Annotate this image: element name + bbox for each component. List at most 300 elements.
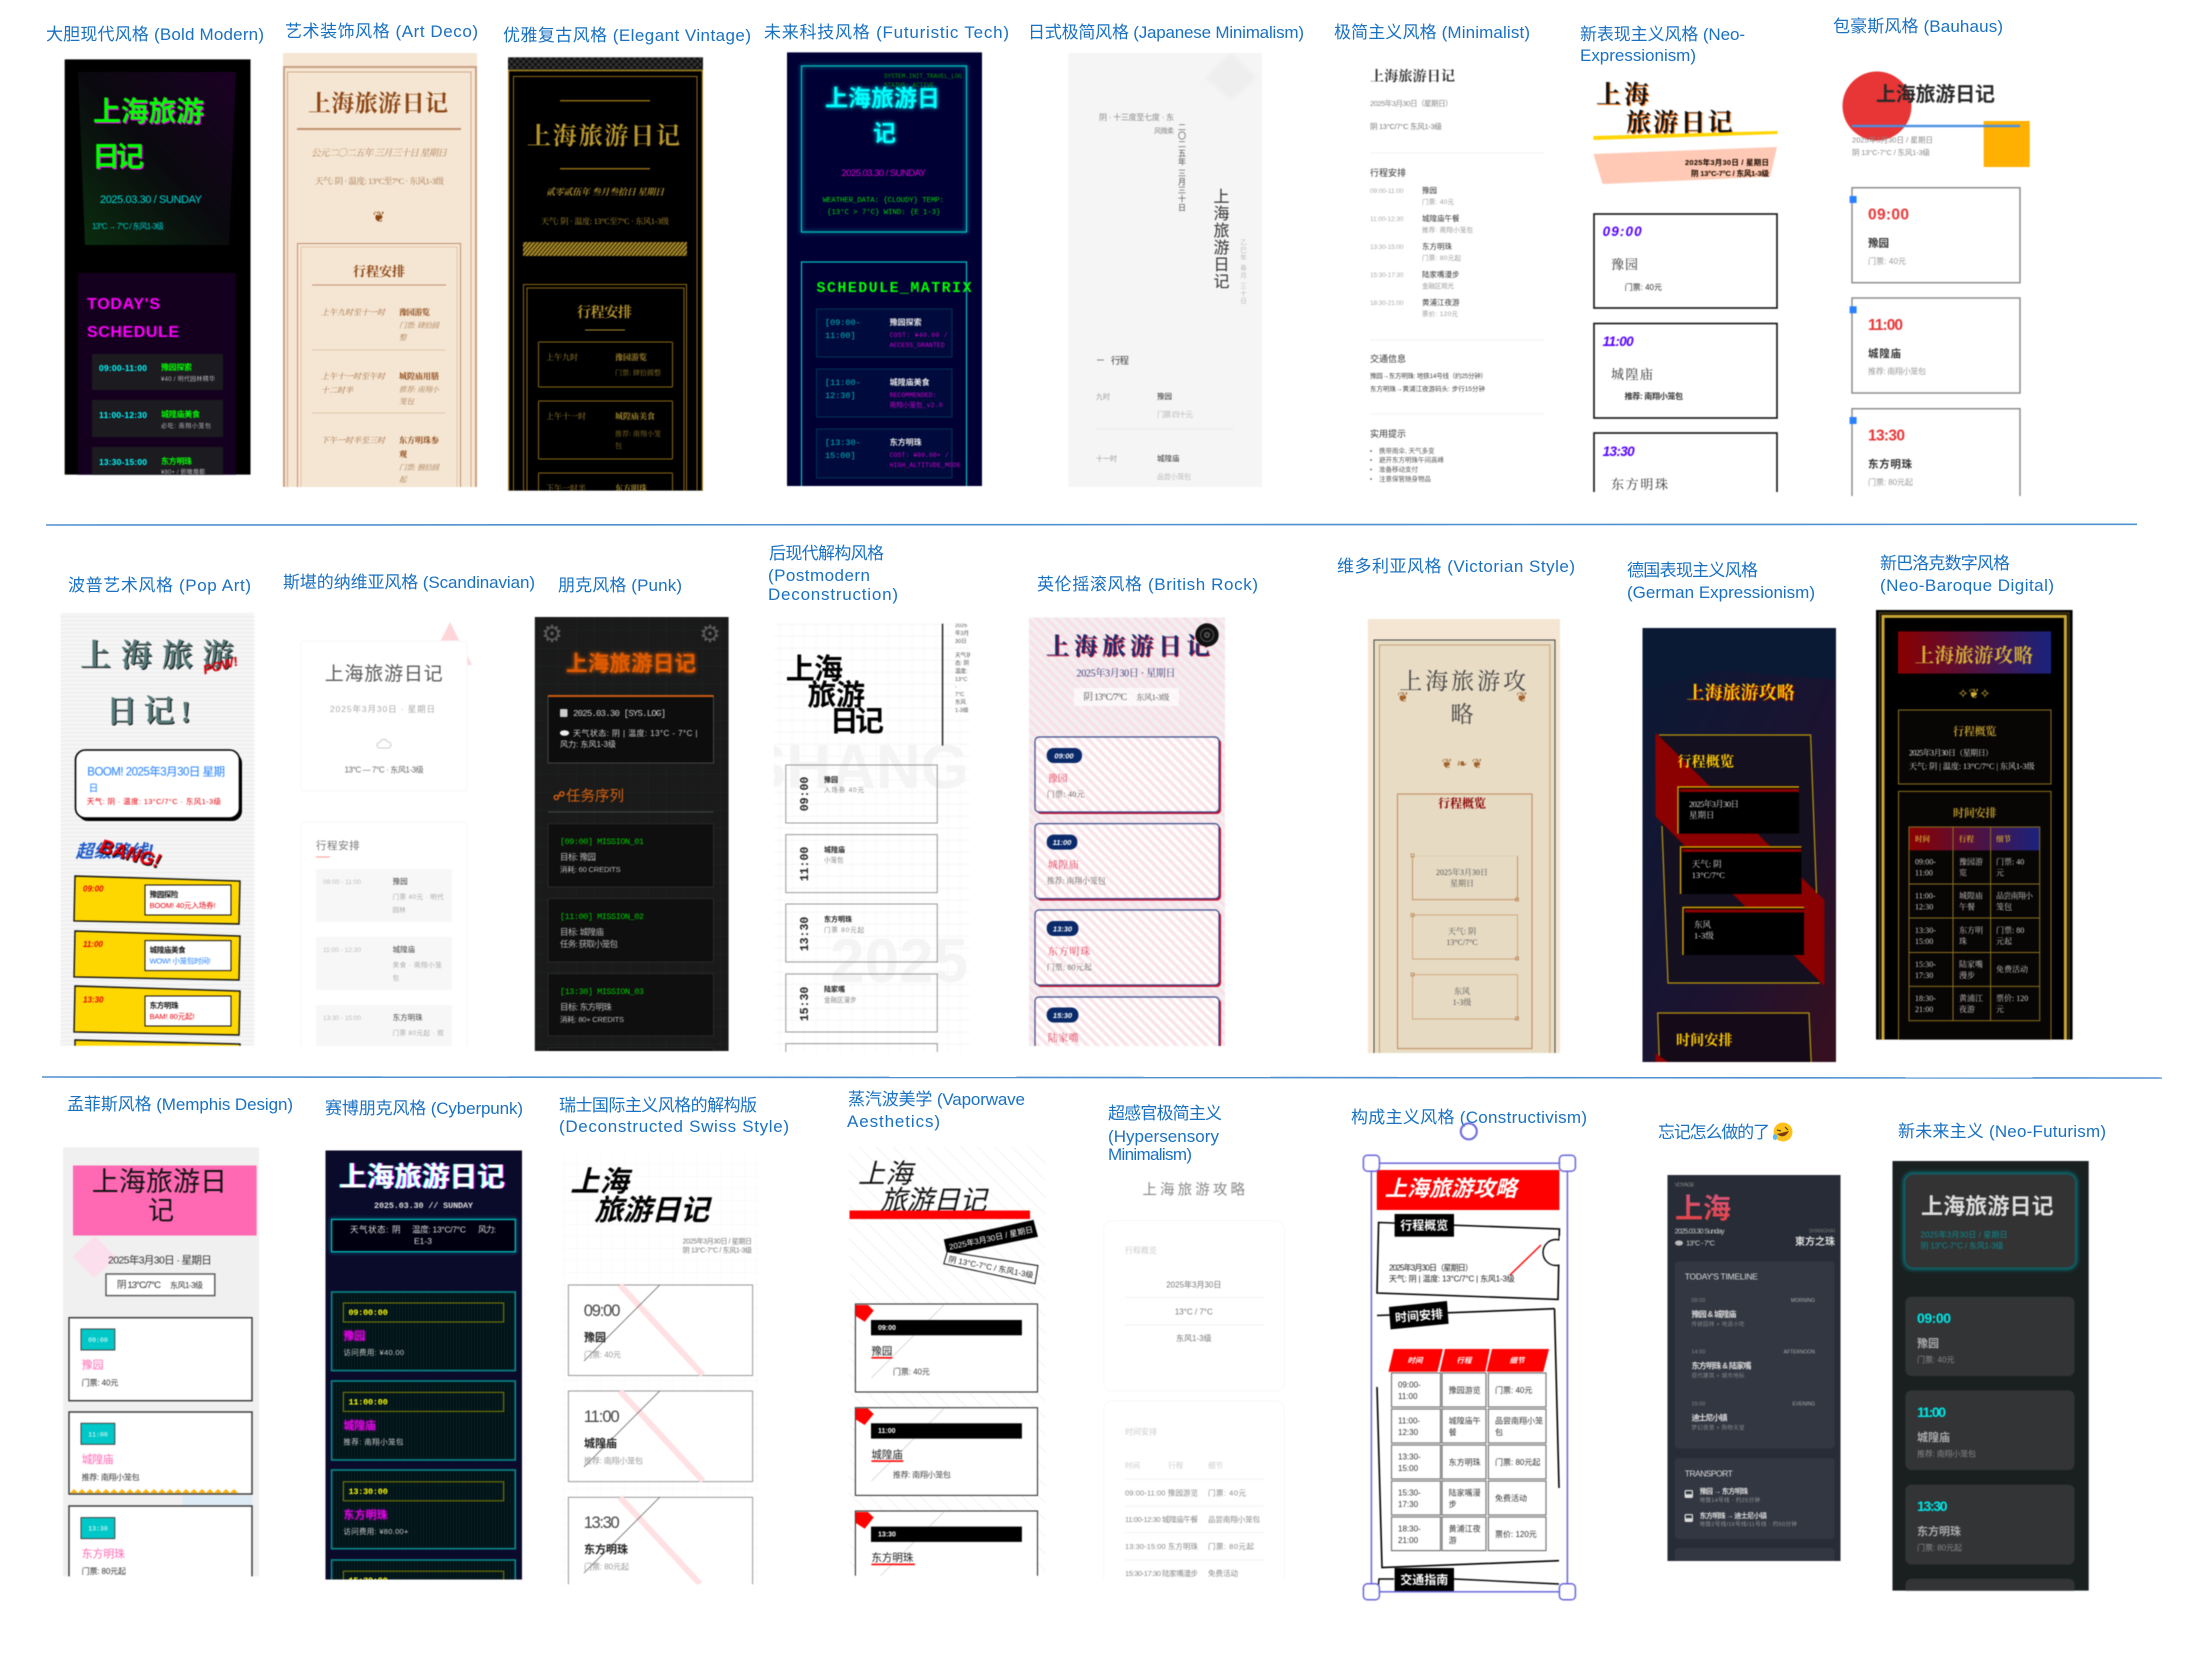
schedule card: 免费活动 [1208, 1568, 1238, 1578]
schedule box: 游 [1449, 1535, 1457, 1545]
card: City God Temple: 11:00 [1053, 838, 1072, 847]
panel: Elegant Vintage [507, 56, 704, 493]
watermark: SHANGHAI [745, 733, 1076, 802]
schedule card: 细节 [1208, 1460, 1224, 1470]
schedule: 15:30-17:30 [1370, 272, 1404, 279]
timeline card: 14:00 [1692, 1350, 1705, 1356]
vertical title: 上海旅游日记 [1210, 188, 1230, 290]
schedule box: 整 [399, 333, 408, 342]
card: Oriental Pearl: 13:30 [88, 1526, 108, 1533]
panel: Punk [534, 616, 730, 1052]
card: 15:30: 陆家嘴 [824, 984, 845, 994]
panel: Minimalist [1370, 68, 1487, 483]
card: Oriental Pearl [1035, 910, 1221, 987]
timeline card: TODAY'S TIMELINE [1685, 1272, 1758, 1282]
timeline card: MORNING [1791, 1298, 1815, 1304]
icon: laughing emoji [1773, 1122, 1792, 1142]
heading: Victorian Style: 维多利亚风格 (Victorian Style) [1337, 557, 1575, 576]
card: City God Temple: 推荐: 南翔小笼包 [1047, 875, 1106, 885]
schedule matrix: 12:30] [825, 391, 856, 401]
icons: ornaments: ❦ ❧ ❦ [1442, 757, 1482, 772]
card: Oriental Pearl: 13:30 [1917, 1498, 1948, 1514]
card: City God Temple: 推荐: 南翔小笼包 [82, 1472, 140, 1482]
section title: 超级路线! [76, 842, 154, 862]
divider: row 2 and row 3 [42, 1077, 2162, 1078]
schedule box: 豫园游览 [399, 307, 430, 317]
weather [1074, 688, 1179, 706]
schedule card: 门票: 80元起 [1208, 1542, 1254, 1551]
schedule box [298, 244, 460, 547]
schedule box: 观 [399, 449, 407, 459]
heading: Japanese Minimalism: 日式极简风格 (Japanese Minimalism) [1028, 23, 1304, 42]
title: 上海 [786, 653, 843, 686]
heading: Constructivism: 构成主义风格 (Constructivism) [1351, 1108, 1587, 1127]
schedule box: 15:00 [1398, 1464, 1419, 1473]
schedule: 门票: 80元起 [1422, 253, 1462, 262]
mission 1: 目标: 豫园 [560, 852, 596, 862]
schedule box: 11:00 [1915, 869, 1933, 878]
timeline card: 豫园 & 城隍庙 [1692, 1309, 1736, 1319]
schedule box: 陆家嘴漫 [1449, 1488, 1481, 1498]
schedule box: 黄浦江夜 [1449, 1524, 1481, 1534]
itinerary: 行程 [1111, 355, 1129, 367]
tips: 携带雨伞, 天气多变 [1379, 446, 1435, 455]
schedule block: 13:30-15:00 [99, 457, 147, 467]
card: City God Temple [1594, 324, 1777, 418]
overview box: 2025年3月30日 [1436, 867, 1488, 877]
schedule box: 豫园游览 [615, 352, 647, 362]
schedule box: 笼包 [399, 397, 414, 406]
panel: Memphis Design [63, 1148, 259, 1578]
schedule box: 十二时半 [321, 386, 354, 395]
panel: Futuristic Tech [786, 52, 983, 487]
card: City God Temple [332, 1381, 515, 1460]
heading: Hypersensory Minimalism [1108, 1104, 1222, 1164]
date: 2025年3月30日 · 星期日 [1076, 666, 1176, 679]
title: 上海旅游日记 [308, 91, 448, 116]
card: 09:00: 09:00 [584, 1302, 620, 1320]
header block [78, 72, 236, 245]
schedule box: 东方明珠 [1449, 1457, 1481, 1467]
schedule card: 品尝南翔小笼包 [1208, 1514, 1260, 1524]
card: 11:00 [786, 835, 937, 893]
mission 1 [548, 824, 714, 887]
heading: Cyberpunk: 赛博朋克风格 (Cyberpunk) [325, 1098, 523, 1118]
card: Yuyuan: 门票: 40元 [1625, 282, 1662, 292]
heading: Hypersensory Minimalism: Minimalism) [1108, 1145, 1192, 1164]
schedule matrix: 11:00] [825, 331, 856, 341]
icons: gears: ⚙ [541, 620, 563, 648]
mission 3: [13:30] MISSION_03 [560, 987, 644, 997]
heading: Pop Art: 波普艺术风格 (Pop Art) [68, 576, 251, 595]
weather label: 阴 13°C-7°C / 东风1-3级 [948, 1254, 1034, 1280]
panel: Cyberpunk [324, 1150, 523, 1586]
schedule block: SCHEDULE [87, 324, 179, 341]
card: Yuyuan [1594, 214, 1777, 308]
card: City God Temple: 城隍庙 [1917, 1430, 1950, 1444]
date: 2025.03.30 // SUNDAY [374, 1201, 474, 1211]
title [80, 638, 234, 729]
schedule box: 细节 [1510, 1356, 1526, 1365]
schedule card [301, 822, 467, 1062]
schedule block: 09:00-11:00 [99, 363, 147, 373]
schedule box: 21:00 [1398, 1536, 1419, 1545]
timeline card: 09:00 [1692, 1298, 1705, 1304]
tips: 准备移动支付 [1379, 464, 1418, 474]
schedule card: 东方明珠 [393, 1012, 423, 1022]
card: Lujiazui [1035, 997, 1221, 1074]
card: 09:00: 豫园 [584, 1330, 606, 1344]
schedule card [1104, 1401, 1284, 1621]
section title [548, 788, 714, 812]
card: Oriental Pearl: 东方明珠 [1917, 1524, 1961, 1538]
schedule card: 时间 [1125, 1460, 1140, 1470]
schedule card: 包 [393, 973, 400, 982]
schedule matrix: 城隍庙美食 [890, 377, 930, 387]
card: 13:30: 13:30 [799, 917, 812, 951]
card: Oriental Pearl: 东方明珠 [1611, 477, 1668, 492]
date and weather: 天气: 阴 · 温度: 13°C至7°C · 东风1-3级 [541, 216, 669, 226]
timeline card: 东方明珠 & 陆家嘴 [1692, 1361, 1752, 1371]
card: City God Temple: 推荐: 南翔小笼包 [343, 1436, 404, 1446]
schedule box: 笼包 [1996, 902, 2012, 912]
heading: German Expressionism [1627, 561, 1815, 602]
schedule box: 09:00- [1398, 1380, 1421, 1390]
overview section: 东风 [1694, 920, 1712, 930]
card: 15:30 [786, 974, 937, 1032]
panel: Bauhaus [1842, 70, 2030, 496]
schedule box: 时间安排 [1953, 805, 1996, 819]
schedule box: 餐 [1449, 1428, 1457, 1437]
panel: Hypersensory Minimalism [1124, 1181, 1260, 1578]
schedule box: 时间安排 [1394, 1306, 1444, 1325]
title block: 记 [148, 1196, 174, 1226]
timeline card: EVENING [1792, 1401, 1815, 1407]
itinerary: 品尝小笼包 [1157, 472, 1191, 481]
header card [301, 641, 467, 791]
timeline card: 迪士尼小镇 [1692, 1412, 1728, 1422]
schedule box: 细节 [1996, 833, 2012, 843]
title: 上海 [570, 1167, 633, 1199]
icon: ornament: ❦ [373, 208, 385, 226]
schedule box: 上午九时至十一时 [321, 308, 386, 317]
speech bubble: 天气: 阴 · 温度: 13°C/7°C · 东风1-3级 [87, 796, 222, 806]
schedule box: 元起 [1996, 936, 2012, 946]
schedule block: ¥40 / 明代园林精华 [161, 375, 215, 383]
schedule box: 览 [1959, 868, 1967, 878]
overview box: 行程概览 [1400, 1218, 1448, 1232]
overview box: 星期日 [1450, 878, 1474, 888]
panel: Bold Modern [64, 58, 252, 476]
card: City God Temple: 城隍庙 [1611, 367, 1653, 382]
header card: 13°C — 7°C · 东风1-3级 [344, 764, 424, 774]
transport: 东方明珠→黄浦江夜游码头: 步行15分钟 [1370, 384, 1486, 393]
schedule box: 品尝南翔小 [1996, 891, 2034, 901]
time section: 时间安排 [1676, 1032, 1732, 1049]
header block: 13°C → 7°C / 东风1-3级 [92, 221, 164, 231]
date label: 2025年3月30日 / 星期日 [948, 1224, 1034, 1252]
card: 09:00 [568, 1285, 753, 1376]
weather box: 风力: [478, 1225, 496, 1235]
pale blue accent [183, 1496, 252, 1506]
panel: Neo-Baroque Digital [1875, 609, 2074, 1040]
date and weather [541, 187, 669, 226]
mission 2 [548, 899, 714, 962]
schedule: 东方明珠 [1422, 241, 1452, 251]
overview box [1377, 1214, 1572, 1299]
icons: gears: ⚙ [699, 620, 721, 648]
schedule box: 门票: 40元 [1495, 1385, 1532, 1395]
log card [548, 695, 714, 763]
meta text: 30日 [955, 638, 967, 645]
overview section: 星期日 [1689, 810, 1715, 820]
transport label: 交通指南 [1400, 1572, 1448, 1587]
schedule matrix: [11:00- [825, 378, 861, 388]
title: 日记 [830, 705, 884, 738]
card: 09:00 [786, 765, 937, 823]
headings [46, 16, 2106, 1164]
card: Yuyuan: 豫园探险 [150, 889, 179, 899]
panel: Japanese Minimalism [1069, 54, 1262, 486]
title: 上海旅游日记 [1876, 82, 1995, 106]
schedule box: 推荐: 南翔小 [399, 385, 440, 394]
heading: Elegant Vintage: 优雅复古风格 (Elegant Vintage) [503, 26, 751, 45]
panel: Neo-Expressionism [1542, 81, 1779, 1257]
overview box [1898, 710, 2051, 784]
itinerary: 城隍庙 [1157, 453, 1180, 463]
panel: Art Deco [282, 52, 478, 488]
card: Yuyuan: 门票: 40元 [82, 1378, 118, 1388]
header card: 2025年3月30日 · 星期日 [330, 704, 435, 714]
timeline card: 现代建筑 × 城市地标 [1692, 1372, 1745, 1380]
card: Yuyuan [1905, 1297, 2074, 1376]
schedule box [524, 284, 686, 588]
overview box: 行程概览 [1953, 724, 1996, 738]
card: Yuyuan [855, 1304, 1038, 1392]
heading: Postmodern Deconstruction: 后现代解构风格 [769, 544, 884, 563]
title: 上海旅游日记 [527, 123, 680, 150]
heading: Futuristic Tech: 未来科技风格 (Futuristic Tech) [764, 23, 1009, 42]
schedule box: 免费活动 [1996, 964, 2028, 974]
card: Yuyuan: 09:00 [878, 1325, 896, 1332]
heading: Postmodern Deconstruction: Deconstruction) [768, 585, 898, 604]
schedule box: 13:30- [1915, 926, 1936, 935]
card: 09:00: 09:00 [799, 777, 812, 811]
title banner [1377, 1170, 1559, 1210]
heading: Bauhaus: 包豪斯风格 (Bauhaus) [1833, 16, 2003, 36]
title: 略 [1450, 702, 1474, 727]
mission 3 [548, 974, 714, 1036]
card: Yuyuan: 豫园 [82, 1359, 104, 1372]
header: 上海 [1675, 1193, 1731, 1224]
schedule block: 11:00-12:30 [99, 410, 147, 420]
overview box: 天气: 阴 | 温度: 13°C/7°C | 东风1-3级 [1909, 761, 2035, 771]
speech bubble: 日 [89, 783, 98, 794]
weather: 阴 · 十三度至七度 · 东 [1099, 112, 1174, 122]
title: 日记! [106, 694, 191, 729]
card: Oriental Pearl: 13:30 [1603, 444, 1635, 459]
header card: 上海旅游日记 [1921, 1194, 2054, 1219]
timeline card: AFTERNOON [1784, 1350, 1815, 1356]
log card: 2025.03.30 [SYS.LOG] [573, 709, 666, 719]
overview section: 2025年3月30日 [1689, 799, 1739, 809]
card: City God Temple [1035, 824, 1221, 901]
meta text: 7°C [955, 692, 964, 698]
schedule box: 12:30 [1915, 903, 1933, 912]
heading: Postmodern Deconstruction [768, 544, 898, 604]
card: City God Temple: 城隍庙 [343, 1418, 376, 1432]
timeline card: 梦幻夜景 × 购物天堂 [1692, 1423, 1745, 1431]
card: Yuyuan [1850, 188, 2020, 283]
heading: Neo-Expressionism: Expressionism) [1580, 46, 1696, 65]
card: Yuyuan: 09:00 [1054, 752, 1074, 760]
heading: Deconstructed Swiss Style [559, 1096, 789, 1136]
transport [1370, 353, 1487, 393]
schedule matrix: 南翔小笼包_v2.0 [890, 400, 943, 409]
timeline card: 传统园林 × 地道小吃 [1692, 1320, 1745, 1328]
icons: ornaments [1397, 690, 1528, 772]
schedule box: 18:30- [1398, 1524, 1421, 1534]
card: Oriental Pearl: 门票: 80元起 [1047, 962, 1092, 972]
transport card: 东方明珠 → 迪士尼小镇 [1700, 1511, 1767, 1520]
card: City God Temple: 城隍庙 [871, 1448, 903, 1461]
transport label [1378, 1568, 1559, 1591]
heading: Neo-Expressionism: 新表现主义风格 (Neo- [1580, 25, 1745, 44]
card: Oriental Pearl: 东方明珠 [1868, 458, 1912, 470]
card: Yuyuan: 09:00 [88, 1337, 108, 1344]
overview box: 2025年3月30日（星期日） [1909, 748, 1993, 758]
card: Yuyuan: BOOM! 40元入场券! [150, 900, 216, 910]
schedule matrix [802, 262, 972, 502]
overview box: 天气: 阴 [1448, 926, 1476, 936]
watermark: 2025 [830, 927, 968, 996]
header card: 上海旅游日记 [325, 663, 443, 685]
tips [1370, 428, 1444, 483]
meta text [955, 623, 972, 714]
header card [1905, 1174, 2075, 1268]
overview section: 13°C/7°C [1692, 870, 1725, 880]
transport card [1675, 1458, 1835, 1539]
schedule: 黄浦江夜游 [1422, 297, 1460, 307]
panel: German Expressionism [1642, 627, 1837, 1063]
card: City God Temple: 11:00 [83, 940, 103, 949]
schedule box: 下午一时半 [546, 483, 586, 493]
schedule box: 门票: 肆拾圆 [399, 321, 440, 330]
icons: ornaments: ❦ [1397, 690, 1409, 706]
date and weather [1852, 134, 1933, 157]
meta text: 天气状 [955, 651, 972, 659]
title [570, 1167, 713, 1227]
schedule box: 元 [1996, 1005, 2004, 1014]
schedule: 城隍庙午餐 [1422, 213, 1460, 223]
card: Oriental Pearl: 13:30:00 [348, 1487, 388, 1497]
header block: 日记 [92, 141, 144, 172]
transport: 豫园→东方明珠: 地铁14号线（约25分钟） [1370, 371, 1487, 380]
schedule block: 必吃: 南翔小笼包 [161, 422, 211, 430]
card: Yuyuan: 09:00 [83, 884, 104, 893]
overview card: 13°C / 7°C [1175, 1307, 1213, 1316]
panel: Constructivism [1363, 1123, 1575, 1600]
schedule card: 园林 [393, 905, 406, 914]
weather box [106, 1274, 215, 1296]
schedule box: 门票: 80 [1996, 925, 2024, 935]
weather box: 天气状态: 阴 [350, 1225, 400, 1235]
schedule box: 品尝南翔小笼 [1495, 1416, 1543, 1426]
meta text: 东风 [955, 698, 967, 706]
weather box: 温度: 13°C/7°C [412, 1225, 466, 1235]
overview card [1104, 1221, 1284, 1391]
schedule box: 18:30- [1915, 994, 1936, 1003]
card: Oriental Pearl: 访问费用: ¥80.00+ [343, 1526, 409, 1536]
schedule box: 起 [399, 475, 408, 484]
title banner: 上海旅游攻略 [1385, 1176, 1520, 1201]
heading: Vaporwave Aesthetics [847, 1090, 1025, 1131]
card: Lujiazui: 15:30 [1053, 1011, 1073, 1020]
section title: 任务序列 [566, 788, 624, 805]
header [1898, 631, 2051, 674]
vertical date: 二〇二五年 三月三十日 [1178, 123, 1186, 212]
header box: STATUS: ACTIVE [884, 82, 934, 89]
card: City God Temple: 11:00 [1603, 334, 1634, 349]
weather [1099, 112, 1174, 135]
tips: 避开东方明珠午间高峰 [1379, 455, 1444, 464]
schedule box: 11:00- [1915, 892, 1936, 901]
selection frame [1363, 1123, 1575, 1600]
schedule: 09:00-11:00 [1370, 188, 1404, 195]
card: Oriental Pearl [74, 986, 240, 1035]
heading: Deconstructed Swiss Style: 瑞士国际主义风格的解构版 [559, 1096, 757, 1115]
speech bubble: BOOM! 2025年3月30日 星期 [87, 764, 225, 778]
schedule box: 黄浦江 [1959, 993, 1983, 1003]
schedule card: 13:30 - 15:00 [323, 1015, 361, 1022]
schedule box: 漫步 [1959, 970, 1975, 980]
card: Oriental Pearl [1850, 409, 2020, 519]
icons: ornaments: ✧❦✧ [1958, 687, 1990, 702]
card: 11:00: 城隍庙 [824, 845, 845, 854]
hatched band [523, 242, 687, 256]
weather: 阴 13°C/7°C [1084, 692, 1127, 703]
header box: 2025.03.30 / SUNDAY [842, 168, 927, 179]
heading: British Rock: 英伦摇滚风格 (British Rock) [1037, 575, 1258, 594]
title [1596, 81, 1732, 137]
header: SHANGHAI [1809, 1229, 1835, 1235]
card: 09:00: 入场券 40元 [824, 785, 864, 794]
header [1675, 1182, 1835, 1248]
date and weather: 阴 13°C/7°C 东风1-3级 [1370, 121, 1442, 131]
schedule card: 09:00 - 11:00 [323, 879, 361, 886]
heading: Vaporwave Aesthetics: Aesthetics) [847, 1112, 940, 1131]
weather: 风微柔 [1154, 126, 1174, 135]
schedule: 推荐: 南翔小笼包 [1422, 225, 1474, 234]
schedule box: 15:00 [1915, 937, 1933, 946]
header: 2025.03.30 Sunday [1675, 1229, 1725, 1236]
header: 東方之珠 [1795, 1235, 1835, 1248]
schedule box: 包 [615, 441, 622, 450]
itinerary: 九时 [1096, 392, 1110, 401]
schedule card: 门票 40元 · 明代 [393, 892, 444, 901]
heading: Neo-Baroque Digital: (Neo-Baroque Digital) [1880, 576, 2054, 595]
schedule box [1377, 1301, 1559, 1568]
divider: row 1 and row 2 [46, 523, 2137, 526]
date and weather: 2025年3月30日 / 星期日 [1852, 134, 1933, 144]
overview card: 2025年3月30日 [1166, 1279, 1221, 1289]
title: 上海 [858, 1159, 916, 1189]
card: Yuyuan: 豫园 [871, 1344, 892, 1358]
meta text: 态: 阴 [955, 659, 970, 667]
transport card: 豫园 → 东方明珠 [1700, 1487, 1748, 1496]
header box: SYSTEM.INIT_TRAVEL_LOG [884, 73, 962, 80]
title: 上海旅游 [80, 638, 234, 673]
